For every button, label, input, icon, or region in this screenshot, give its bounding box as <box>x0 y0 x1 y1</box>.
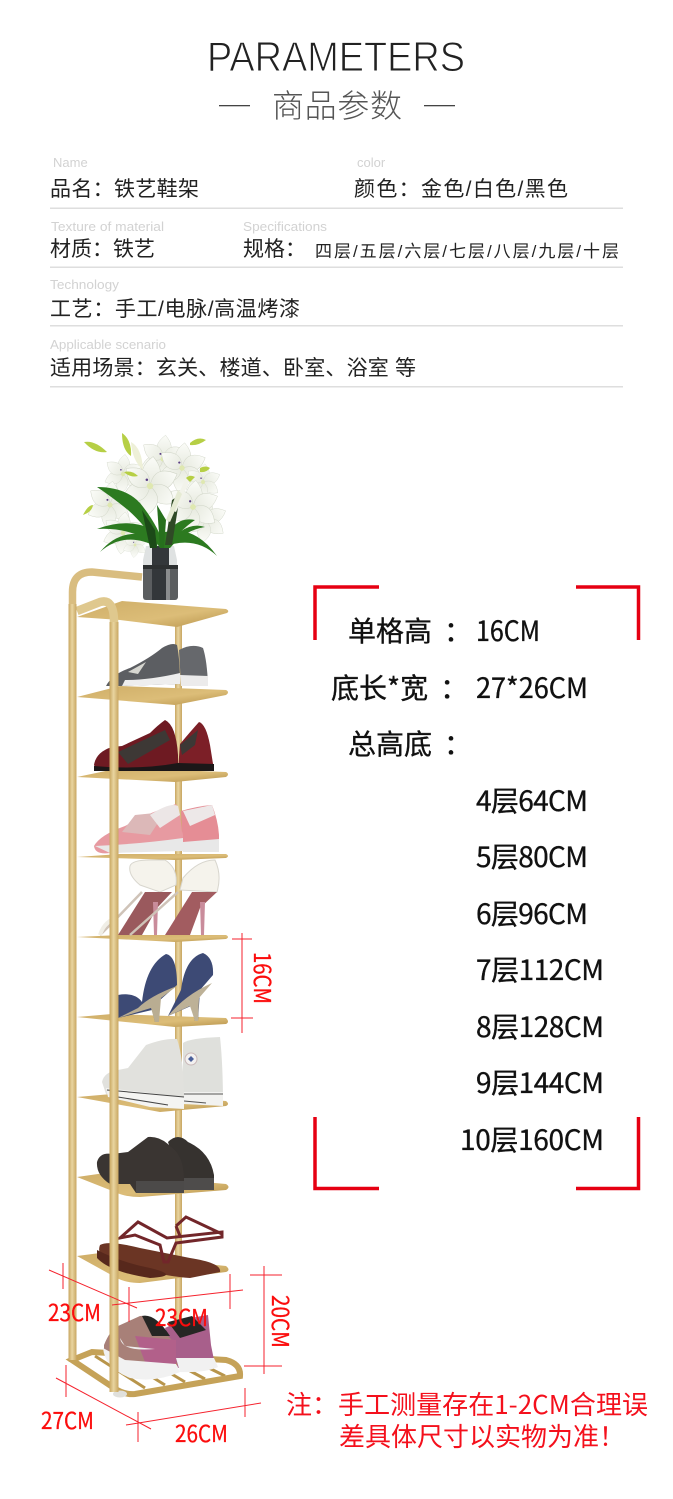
row: scenario <box>50 337 623 388</box>
row: name and colour: 颜色：金色/白色/黑色 <box>354 178 568 201</box>
size text: 4层64CM <box>476 780 588 820</box>
size text: 16CM <box>476 610 540 650</box>
dimension: 26CM base width: 26CM <box>175 1415 228 1449</box>
note: measurement tolerance: 注：手工测量存在1-2CM合理误 <box>286 1385 648 1422</box>
dimension: 23CM depth <box>48 1263 137 1328</box>
size text: 总高底 ： <box>348 723 472 763</box>
base frame <box>72 1352 240 1398</box>
row: technology: Technology <box>50 277 120 292</box>
row: material and specifications: Specifications <box>243 219 328 234</box>
row: name and colour: 品名：铁艺鞋架 <box>50 178 199 201</box>
row: name and colour <box>50 155 623 209</box>
corner brackets <box>315 587 638 1188</box>
shoes: dark leather <box>97 1137 214 1193</box>
size text: 6层96CM <box>476 893 588 933</box>
shoes: grey trainers <box>106 644 208 686</box>
size text: 8层128CM <box>476 1006 604 1046</box>
shoes: pink trainers <box>94 804 219 853</box>
size text: 9层144CM <box>476 1062 604 1102</box>
rack: rear frame <box>72 572 182 1362</box>
row: material and specifications: Texture of material <box>51 219 164 234</box>
row: technology: 工艺：手工/电脉/高温烤漆 <box>50 298 300 321</box>
dimension: 27CM base length <box>41 1365 151 1436</box>
rack: front frame <box>68 601 118 1392</box>
heading: PARAMETERS: PARAMETERS <box>207 33 465 80</box>
shoes: white and pink heels <box>100 860 219 935</box>
shoes: pink knit trainers <box>103 1315 218 1380</box>
dimension: 23CM width <box>112 1274 243 1333</box>
dimension: 20CM bottom height <box>244 1266 299 1374</box>
subheading: 商品参数: 商品参数 <box>272 88 402 124</box>
shoes: red sandals <box>97 1217 222 1278</box>
size text: 单格高 ： <box>348 610 472 650</box>
shoes: red loafers <box>94 720 214 771</box>
size text: 27*26CM <box>476 667 588 707</box>
vase <box>143 546 178 600</box>
dimension: 20CM bottom height: 20CM <box>265 1295 299 1348</box>
dimension: 26CM base width <box>126 1388 261 1449</box>
size text <box>331 610 604 1159</box>
row: name and colour: Name <box>53 155 88 170</box>
leaves <box>97 478 217 556</box>
row: material and specifications: 四层/五层/六层/七层/八层/九层/十层 <box>315 242 619 261</box>
dimension: 16CM shelf height: 16CM <box>247 952 281 1004</box>
panel: size list with red corner brackets <box>315 587 638 1188</box>
row: material and specifications: 材质：铁艺 <box>50 238 155 261</box>
product: shoe rack with flowers and shoes <box>68 433 240 1398</box>
parameter table <box>50 155 623 388</box>
row: material and specifications: 规格： <box>243 238 306 261</box>
row: scenario: 适用场景：玄关、楼道、卧室、浴室 等 <box>50 357 416 380</box>
note: measurement tolerance <box>286 1385 648 1454</box>
dimension: 16CM shelf height <box>231 933 281 1033</box>
shelves <box>77 601 228 1283</box>
row: technology <box>50 277 623 326</box>
lily blooms <box>85 435 228 558</box>
shoes: white high tops <box>102 1037 223 1109</box>
buds <box>83 433 210 515</box>
row: name and colour: color <box>357 155 386 170</box>
size text: 5层80CM <box>476 836 588 876</box>
dimension: 23CM width: 23CM <box>155 1299 208 1333</box>
icon: flowers in vase <box>83 433 228 600</box>
dimension: 23CM depth: 23CM <box>48 1294 101 1328</box>
size text: 7层112CM <box>476 949 604 989</box>
size text: 底长*宽 ： <box>331 667 468 707</box>
dimension: 27CM base length: 27CM <box>41 1402 94 1436</box>
size text: 10层160CM <box>460 1119 604 1159</box>
shoes: navy heels <box>118 953 213 1022</box>
note: measurement tolerance: 差具体尺寸以实物为准！ <box>339 1417 625 1454</box>
row: scenario: Applicable scenario <box>50 337 166 352</box>
row: material and specifications <box>50 219 623 268</box>
